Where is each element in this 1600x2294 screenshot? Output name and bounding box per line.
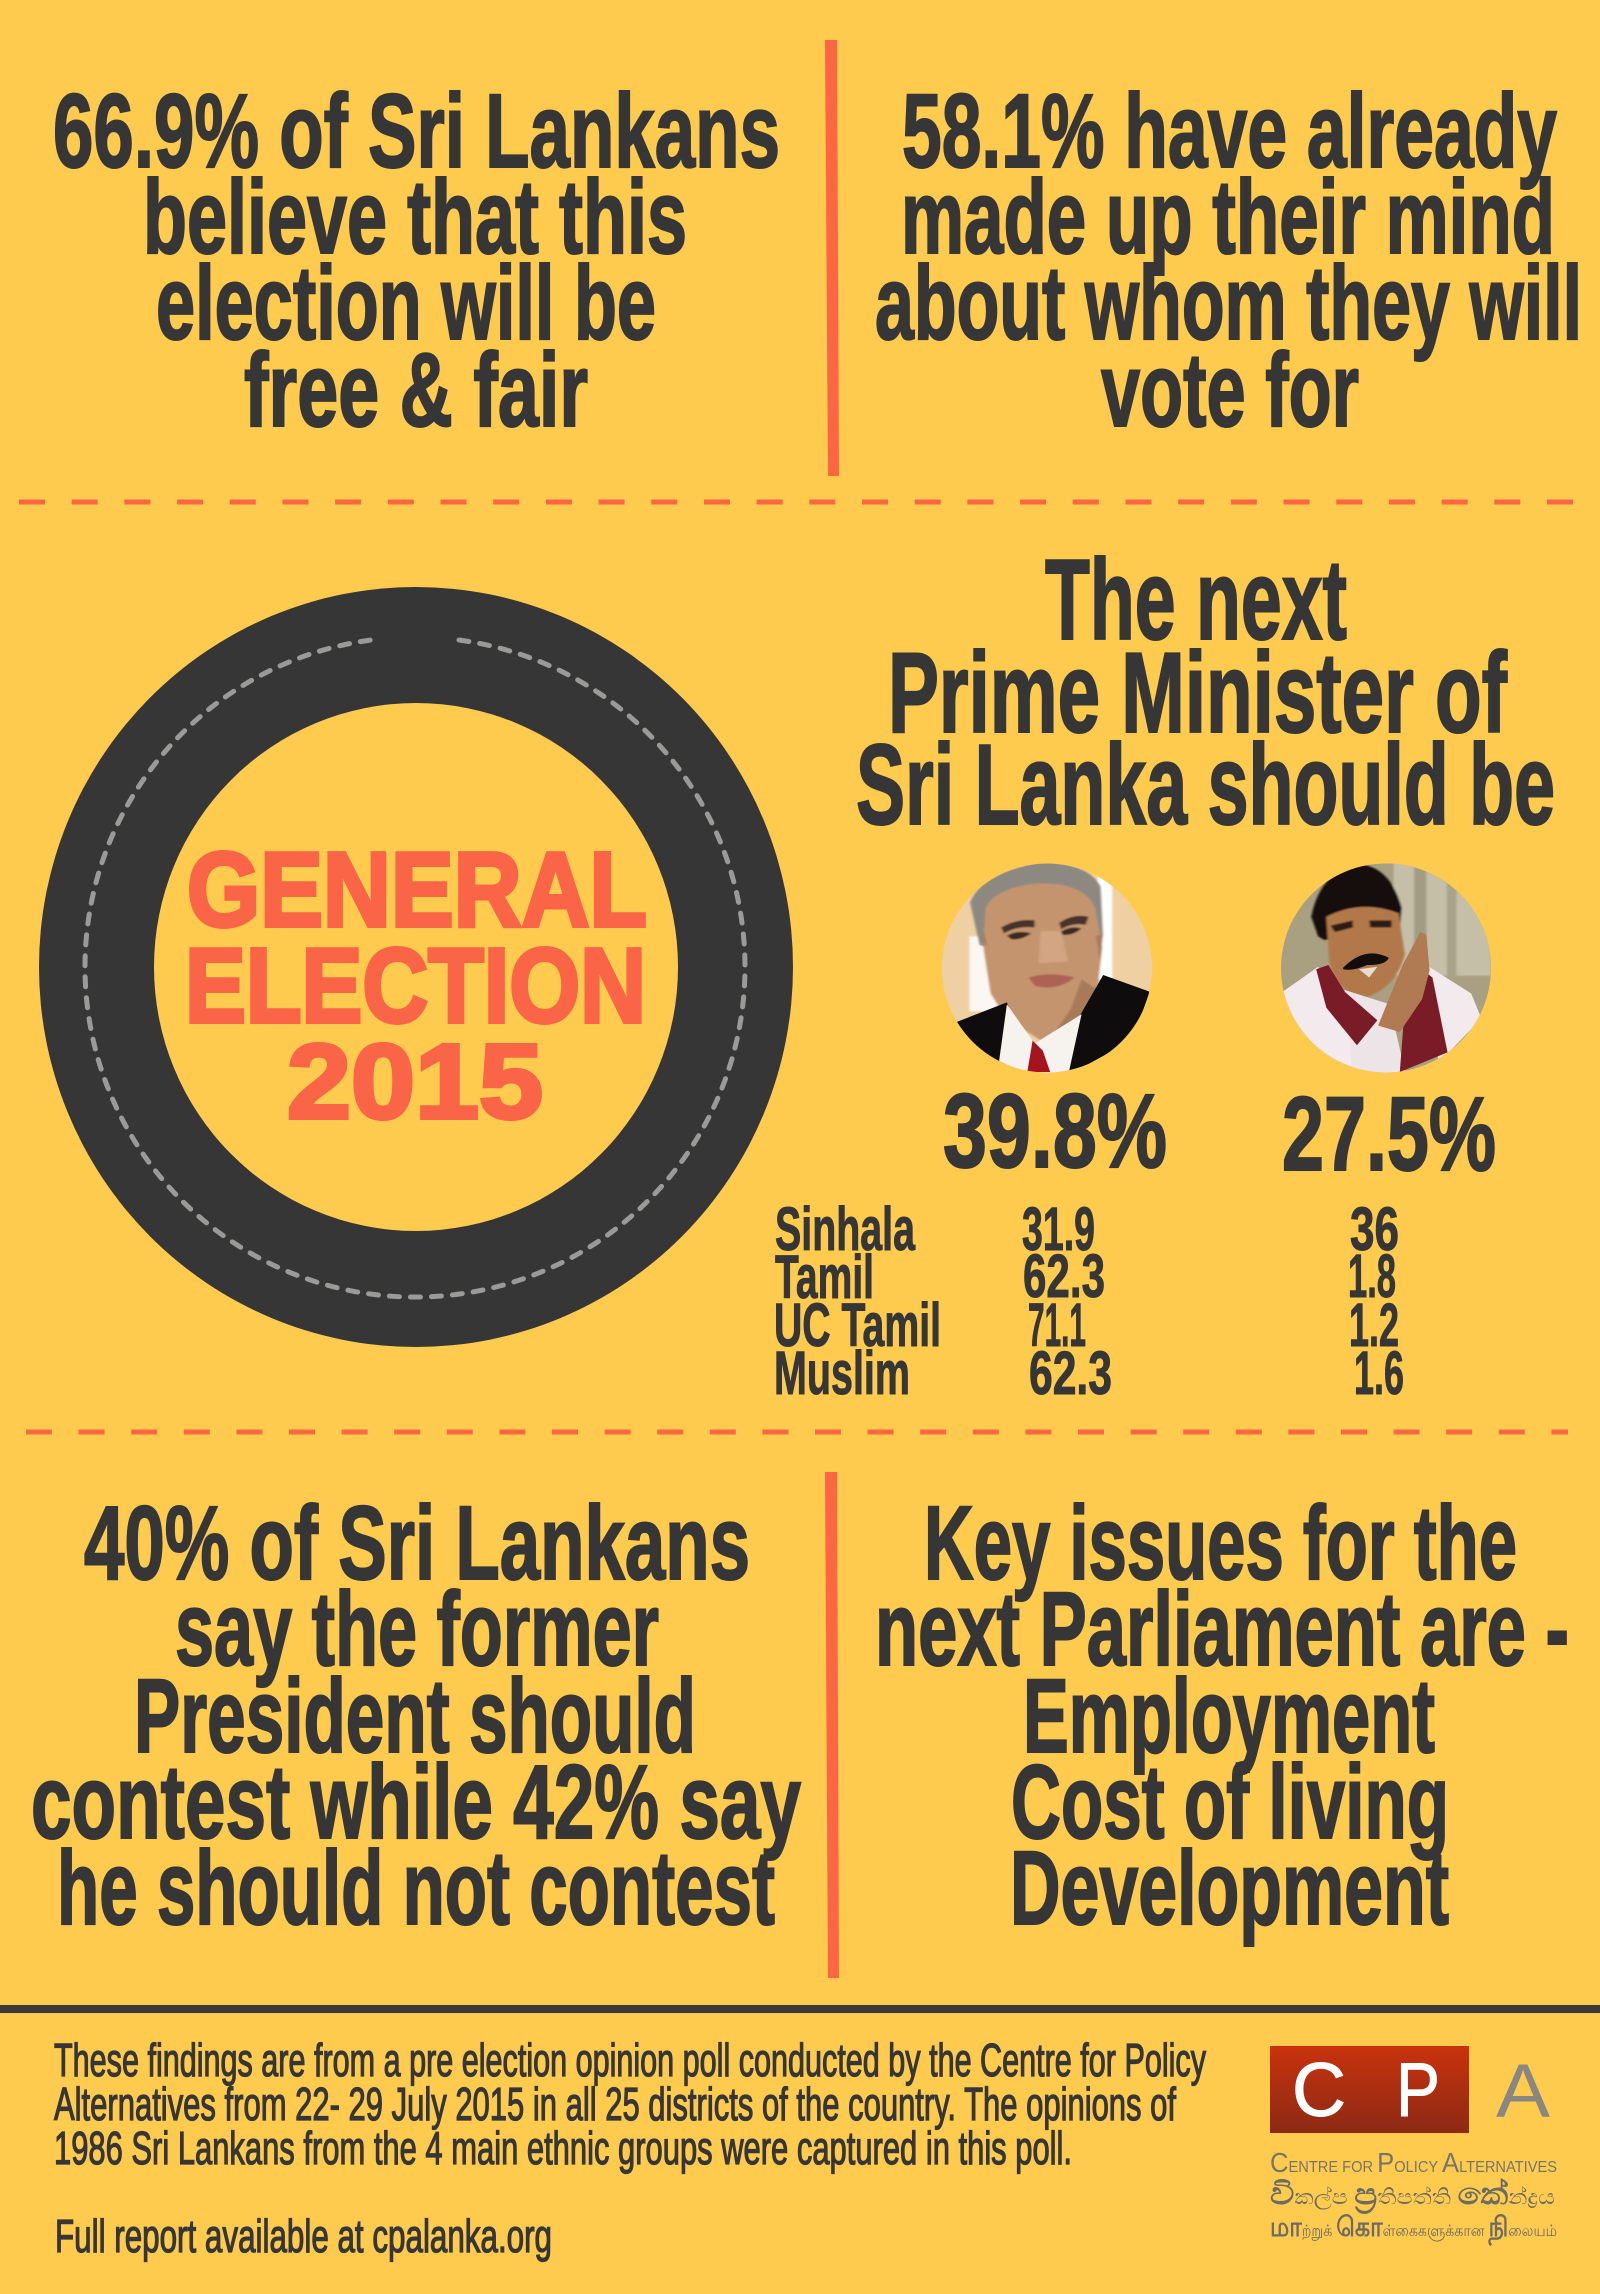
title: general election 2015: 2015 bbox=[287, 1023, 543, 1141]
table: support by ethnic group: 71.1 bbox=[1028, 1291, 1086, 1359]
table: support by ethnic group: Muslim bbox=[774, 1339, 910, 1407]
divider: bottom vertical bar bbox=[825, 1472, 839, 1978]
panel: former president statistic bbox=[31, 1485, 801, 1947]
panel: made up their mind statistic: vote for bbox=[1101, 332, 1359, 449]
heading: next prime minister bbox=[856, 537, 1555, 849]
panel: made up their mind statistic bbox=[875, 73, 1582, 449]
text block: poll methodology note: 1986 Sri Lankans from the 4 main ethnic groups were captured in this poll. bbox=[54, 2122, 1072, 2174]
road centre line bbox=[85, 640, 745, 1297]
heading: next prime minister: The next bbox=[1045, 537, 1347, 664]
table: support by ethnic group: 62.3 bbox=[1023, 1242, 1105, 1310]
text block: poll methodology note: Full report available at cpalanka.org bbox=[55, 2210, 552, 2262]
logo: centre for policy alternatives: A bbox=[1496, 2049, 1550, 2134]
table: support by ethnic group: 1.6 bbox=[1354, 1339, 1404, 1407]
panel: free and fair statistic: election will be bbox=[156, 245, 656, 362]
value: second candidate percentage: 27.5% bbox=[1282, 1076, 1496, 1193]
logo: centre for policy alternatives bbox=[1270, 2046, 1557, 2246]
icon: portrait of first candidate bbox=[940, 860, 1155, 1076]
title: general election 2015 bbox=[185, 831, 647, 1141]
table: support by ethnic group: Tamil bbox=[775, 1243, 874, 1311]
text block: poll methodology note bbox=[54, 2034, 1206, 2262]
logo: centre for policy alternatives: CENTRE FOR POLICY ALTERNATIVES bbox=[1270, 2147, 1557, 2178]
road ring emblem bbox=[39, 587, 793, 1347]
divider: top vertical bar bbox=[825, 40, 839, 476]
table: support by ethnic group: UC Tamil bbox=[774, 1291, 941, 1359]
panel: free and fair statistic: free & fair bbox=[244, 332, 588, 449]
panel: former president statistic: President should bbox=[134, 1658, 696, 1775]
value: first candidate percentage: 39.8% bbox=[943, 1073, 1167, 1190]
logo: centre for policy alternatives: மாற்றுக் கொள்கைகளுக்கான நிலையம் bbox=[1270, 2212, 1557, 2246]
logo: centre for policy alternatives: P bbox=[1396, 2048, 1440, 2133]
panel: former president statistic: say the former bbox=[175, 1571, 659, 1688]
table: support by ethnic group: 31.9 bbox=[1022, 1195, 1095, 1263]
icon: portrait of second candidate bbox=[1278, 860, 1493, 1077]
table: support by ethnic group: 1.8 bbox=[1348, 1242, 1396, 1310]
panel: free and fair statistic: 66.9% of Sri Lankans bbox=[53, 73, 780, 190]
logo: centre for policy alternatives: C bbox=[1292, 2048, 1346, 2133]
table: support by ethnic group: 62.3 bbox=[1029, 1339, 1112, 1407]
table: support by ethnic group: 36 bbox=[1350, 1195, 1399, 1263]
panel: free and fair statistic bbox=[53, 73, 780, 449]
panel: former president statistic: he should not contest bbox=[57, 1830, 775, 1947]
title: general election 2015: GENERAL bbox=[187, 831, 647, 949]
logo: centre for policy alternatives: විකල්ප ප්‍රතිපත්ති කේ න්ද්‍රය bbox=[1270, 2178, 1555, 2214]
table: support by ethnic group: 1.2 bbox=[1349, 1291, 1399, 1359]
table: support by ethnic group: Sinhala bbox=[775, 1195, 916, 1263]
panel: former president statistic: 40% of Sri Lankans bbox=[84, 1485, 750, 1602]
panel: former president statistic: contest while 42% say bbox=[31, 1744, 801, 1861]
title: general election 2015: ELECTION bbox=[185, 927, 646, 1045]
panel: free and fair statistic: believe that this bbox=[143, 159, 687, 276]
panel: key issues bbox=[875, 1485, 1569, 1947]
table: support by ethnic group bbox=[774, 1195, 1404, 1407]
